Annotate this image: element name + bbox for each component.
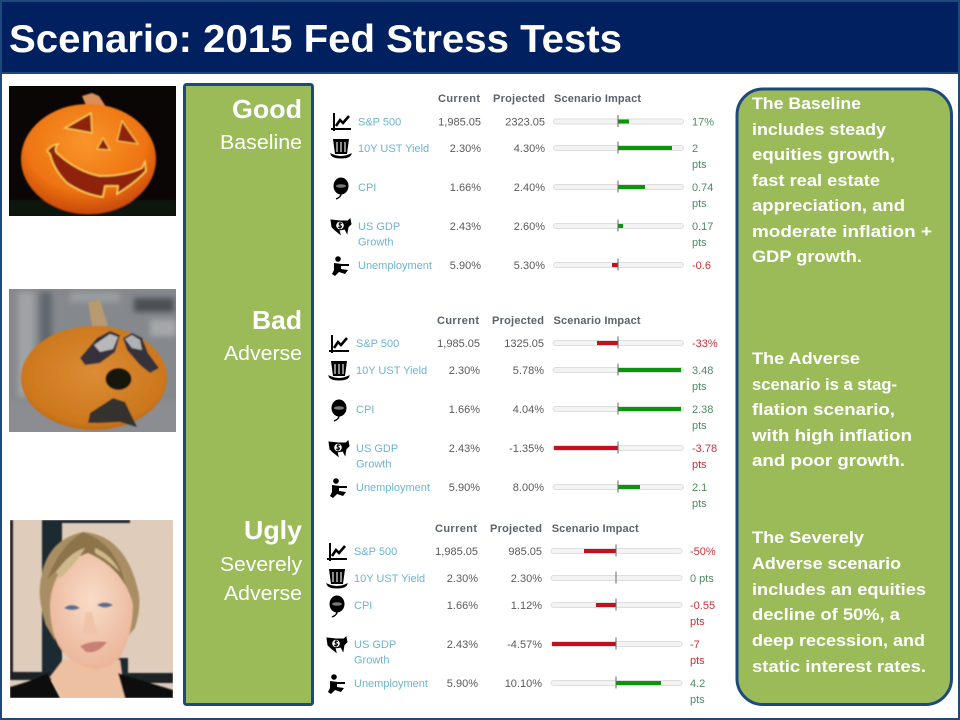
- row: 10Y UST Yield: [329, 361, 713, 393]
- row: US GDP Growth: pts: [690, 655, 705, 667]
- row: S&P 500: 1,985.05: [435, 546, 478, 558]
- row: CPI: CPI: [356, 404, 374, 416]
- row: 10Y UST Yield: [331, 139, 707, 171]
- row: 10Y UST Yield: 5.78%: [513, 365, 544, 377]
- photo: smiling jack-o-lantern: [9, 86, 176, 216]
- text: adverse description: The Adverse: [752, 349, 860, 368]
- row: Unemployment: 10.10%: [505, 678, 542, 690]
- row: 10Y UST Yield: pts: [692, 159, 707, 171]
- row: 10Y UST Yield: 0 pts: [690, 573, 714, 585]
- row: US GDP Growth: 0.17: [692, 221, 713, 233]
- row: US GDP Growth: -3.78: [692, 443, 717, 455]
- label: Bad Adverse: Bad: [252, 305, 302, 335]
- row: CPI: [332, 400, 713, 432]
- text: severely adverse description: static interest rates.: [752, 657, 926, 676]
- row: US GDP Growth: -4.57%: [507, 639, 542, 651]
- text: baseline description: fast real estate: [752, 171, 880, 190]
- column headers: Current: [437, 315, 479, 327]
- row: S&P 500: 1,985.05: [438, 116, 481, 128]
- row: Unemployment: 5.90%: [447, 678, 478, 690]
- panel: scenario descriptions: [737, 89, 952, 704]
- row: Unemployment: Unemployment: [354, 678, 428, 690]
- row: CPI: pts: [692, 198, 707, 210]
- label: Bad Adverse: Adverse: [224, 343, 302, 365]
- row: US GDP Growth: 2.60%: [514, 221, 545, 233]
- row: 10Y UST Yield: pts: [692, 381, 707, 393]
- row: S&P 500: -33%: [692, 338, 718, 350]
- row: US GDP Growth: US GDP: [358, 221, 400, 233]
- text: adverse description: flation scenario,: [752, 400, 895, 419]
- row: 10Y UST Yield: 2.30%: [449, 365, 480, 377]
- text: baseline description: The Baseline: [752, 94, 861, 113]
- row: CPI: CPI: [354, 600, 372, 612]
- text: baseline description: appreciation, and: [752, 196, 905, 215]
- label: Bad Adverse: [224, 305, 302, 365]
- row: CPI: 2.40%: [514, 182, 545, 194]
- row: Unemployment: [328, 674, 705, 706]
- row: US GDP Growth: pts: [692, 459, 707, 471]
- row: US GDP Growth: 2.43%: [450, 221, 481, 233]
- label: Good Baseline: Good: [232, 94, 302, 124]
- row: CPI: 0.74: [692, 182, 713, 194]
- row: US GDP Growth: [329, 441, 717, 471]
- row: CPI: -0.55: [690, 600, 715, 612]
- row: US GDP Growth: Growth: [354, 654, 389, 666]
- row: Unemployment: [332, 256, 711, 276]
- row: CPI: pts: [692, 420, 707, 432]
- text: baseline description: GDP growth.: [752, 247, 862, 266]
- text: baseline description: [752, 94, 932, 266]
- row: S&P 500: [329, 335, 718, 353]
- row: 10Y UST Yield: 2.30%: [511, 573, 542, 585]
- row: CPI: [330, 596, 715, 628]
- row: 10Y UST Yield: 3.48: [692, 365, 713, 377]
- label: Ugly Severely Adverse: Ugly: [244, 515, 303, 545]
- text: baseline description: includes steady: [752, 120, 887, 139]
- row: US GDP Growth: pts: [692, 237, 707, 249]
- text: adverse description: with high inflation: [751, 426, 912, 445]
- label: Ugly Severely Adverse: Adverse: [224, 583, 302, 605]
- text: adverse description: and poor growth.: [752, 451, 905, 470]
- row: US GDP Growth: [331, 219, 713, 249]
- column headers: Scenario Impact: [554, 315, 641, 327]
- row: US GDP Growth: US GDP: [354, 639, 396, 651]
- column headers: Current: [438, 93, 480, 105]
- row: 10Y UST Yield: 2.30%: [447, 573, 478, 585]
- row: US GDP Growth: Growth: [358, 236, 393, 248]
- row: Unemployment: [330, 478, 707, 510]
- photo: collapsed rotten pumpkin: [5, 289, 180, 436]
- text: adverse description: scenario is a stag-: [752, 375, 897, 394]
- row: CPI: 1.66%: [449, 404, 480, 416]
- label: Good Baseline: Baseline: [220, 132, 302, 154]
- row: S&P 500: 2323.05: [505, 116, 545, 128]
- row: S&P 500: 985.05: [508, 546, 542, 558]
- row: S&P 500: [331, 113, 714, 131]
- row: US GDP Growth: [327, 637, 705, 667]
- row: 10Y UST Yield: 2: [692, 143, 698, 155]
- row: S&P 500: S&P 500: [354, 546, 397, 558]
- column headers: Current: [435, 523, 477, 535]
- title banner: [1, 1, 959, 73]
- title: Scenario: 2015 Fed Stress Tests: [9, 18, 622, 61]
- row: Unemployment: 5.30%: [514, 260, 545, 272]
- row: S&P 500: S&P 500: [358, 116, 401, 128]
- table: baseline scenario: [331, 93, 714, 276]
- row: CPI: 2.38: [692, 404, 713, 416]
- row: Unemployment: Unemployment: [358, 260, 432, 272]
- row: Unemployment: pts: [692, 498, 707, 510]
- column headers: Scenario Impact: [554, 93, 641, 105]
- column headers: [435, 523, 639, 535]
- row: CPI: 1.66%: [447, 600, 478, 612]
- row: 10Y UST Yield: 4.30%: [514, 143, 545, 155]
- row: 10Y UST Yield: 10Y UST Yield: [356, 365, 427, 377]
- text: adverse description: [751, 349, 912, 470]
- photo: portrait of a woman: [10, 520, 173, 698]
- row: 10Y UST Yield: 10Y UST Yield: [358, 143, 429, 155]
- row: S&P 500: 1,985.05: [437, 338, 480, 350]
- row: US GDP Growth: -1.35%: [509, 443, 544, 455]
- row: CPI: pts: [690, 616, 705, 628]
- row: S&P 500: S&P 500: [356, 338, 399, 350]
- row: 10Y UST Yield: 10Y UST Yield: [354, 573, 425, 585]
- row: US GDP Growth: -7: [690, 639, 700, 651]
- row: S&P 500: [327, 543, 716, 561]
- table: severely adverse scenario: [327, 523, 716, 706]
- row: S&P 500: -50%: [690, 546, 716, 558]
- text: severely adverse description: deep recession, and: [752, 631, 925, 650]
- text: severely adverse description: [752, 528, 926, 676]
- row: CPI: CPI: [358, 182, 376, 194]
- panel: scenario labels: [184, 84, 312, 704]
- row: Unemployment: -0.6: [692, 260, 711, 272]
- column headers: Projected: [490, 523, 542, 535]
- row: Unemployment: pts: [690, 694, 705, 706]
- label: Ugly Severely Adverse: [220, 515, 303, 605]
- row: US GDP Growth: 2.43%: [449, 443, 480, 455]
- row: CPI: 4.04%: [513, 404, 544, 416]
- row: Unemployment: 5.90%: [449, 482, 480, 494]
- row: S&P 500: 1325.05: [504, 338, 544, 350]
- text: severely adverse description: includes an equities: [752, 580, 926, 599]
- column headers: Projected: [493, 93, 545, 105]
- row: Unemployment: 8.00%: [513, 482, 544, 494]
- row: Unemployment: Unemployment: [356, 482, 430, 494]
- label: Good Baseline: [220, 94, 302, 154]
- text: baseline description: equities growth,: [752, 145, 895, 164]
- text: severely adverse description: decline of 50%, a: [752, 605, 901, 624]
- label: Ugly Severely Adverse: Severely: [220, 554, 302, 576]
- row: S&P 500: 17%: [692, 116, 714, 128]
- column headers: [437, 315, 641, 327]
- row: Unemployment: 5.90%: [450, 260, 481, 272]
- text: baseline description: moderate inflation +: [752, 222, 932, 241]
- row: US GDP Growth: US GDP: [356, 443, 398, 455]
- text: severely adverse description: The Severely: [752, 528, 865, 547]
- table: adverse scenario: [329, 315, 718, 510]
- row: US GDP Growth: Growth: [356, 458, 391, 470]
- row: 10Y UST Yield: [327, 569, 714, 588]
- row: US GDP Growth: 2.43%: [447, 639, 478, 651]
- row: 10Y UST Yield: 2.30%: [450, 143, 481, 155]
- row: CPI: 1.66%: [450, 182, 481, 194]
- row: CPI: [334, 178, 713, 210]
- text: severely adverse description: Adverse scenario: [752, 554, 901, 573]
- row: Unemployment: 2.1: [692, 482, 707, 494]
- column headers: Scenario Impact: [552, 523, 639, 535]
- row: CPI: 1.12%: [511, 600, 542, 612]
- column headers: [438, 93, 641, 105]
- column headers: Projected: [492, 315, 544, 327]
- row: Unemployment: 4.2: [690, 678, 705, 690]
